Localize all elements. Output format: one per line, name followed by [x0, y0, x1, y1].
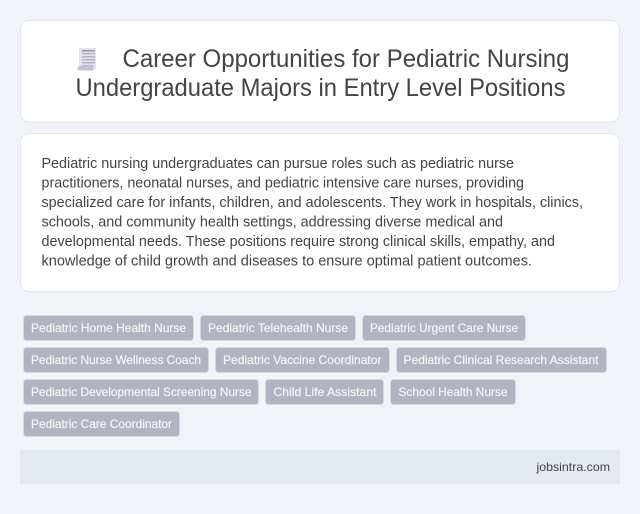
panel: description card	[20, 134, 620, 292]
description text: practitioners, neonatal nurses, and pediatric intensive care nurses, providing	[42, 176, 524, 192]
tag: Pediatric Clinical Research Assistant	[396, 348, 606, 372]
tag list	[24, 316, 606, 436]
tag: School Health Nurse: School Health Nurse	[398, 385, 508, 399]
tag: Pediatric Care Coordinator: Pediatric Care Coordinator	[31, 417, 172, 431]
tag: Pediatric Clinical Research Assistant: Pediatric Clinical Research Assistant	[404, 353, 599, 367]
tag: Pediatric Home Health Nurse	[24, 316, 194, 340]
tag: School Health Nurse	[390, 380, 516, 404]
icon: document scroll	[78, 48, 96, 70]
tag: Child Life Assistant: Child Life Assistant	[274, 385, 377, 399]
heading: Undergraduate Majors in Entry Level Positions	[76, 74, 566, 102]
tag: Pediatric Telehealth Nurse: Pediatric Telehealth Nurse	[208, 321, 348, 335]
description text: developmental needs. These positions require strong clinical skills, empathy, and	[42, 234, 555, 250]
tag: Pediatric Vaccine Coordinator	[216, 348, 390, 372]
description text: knowledge of child growth and diseases to ensure optimal patient outcomes.	[42, 254, 532, 270]
tag: Pediatric Nurse Wellness Coach: Pediatric Nurse Wellness Coach	[31, 353, 201, 367]
tag: Pediatric Developmental Screening Nurse	[24, 380, 258, 404]
tag: Pediatric Vaccine Coordinator: Pediatric Vaccine Coordinator	[223, 353, 382, 367]
footer bar	[20, 450, 620, 484]
tag: Pediatric Developmental Screening Nurse: Pediatric Developmental Screening Nurse	[31, 385, 252, 399]
panel: title card	[20, 20, 620, 122]
tag: Pediatric Urgent Care Nurse	[362, 316, 526, 340]
footer source text: jobsintra.com	[535, 460, 610, 474]
description text: specialized care for infants, children, and adolescents. They work in hospitals, clinics,	[42, 195, 583, 211]
description text: Pediatric nursing undergraduates can pursue roles such as pediatric nurse	[42, 156, 514, 172]
tag: Pediatric Telehealth Nurse	[200, 316, 356, 340]
tag: Pediatric Nurse Wellness Coach	[24, 348, 208, 372]
tag: Pediatric Care Coordinator	[24, 412, 180, 436]
heading: Career Opportunities for Pediatric Nursing	[122, 45, 570, 73]
tag: Pediatric Urgent Care Nurse: Pediatric Urgent Care Nurse	[370, 321, 518, 335]
description text: schools, and community health settings, addressing diverse medical and	[42, 214, 503, 230]
tag: Child Life Assistant	[266, 380, 384, 404]
tag: Pediatric Home Health Nurse: Pediatric Home Health Nurse	[31, 321, 186, 335]
